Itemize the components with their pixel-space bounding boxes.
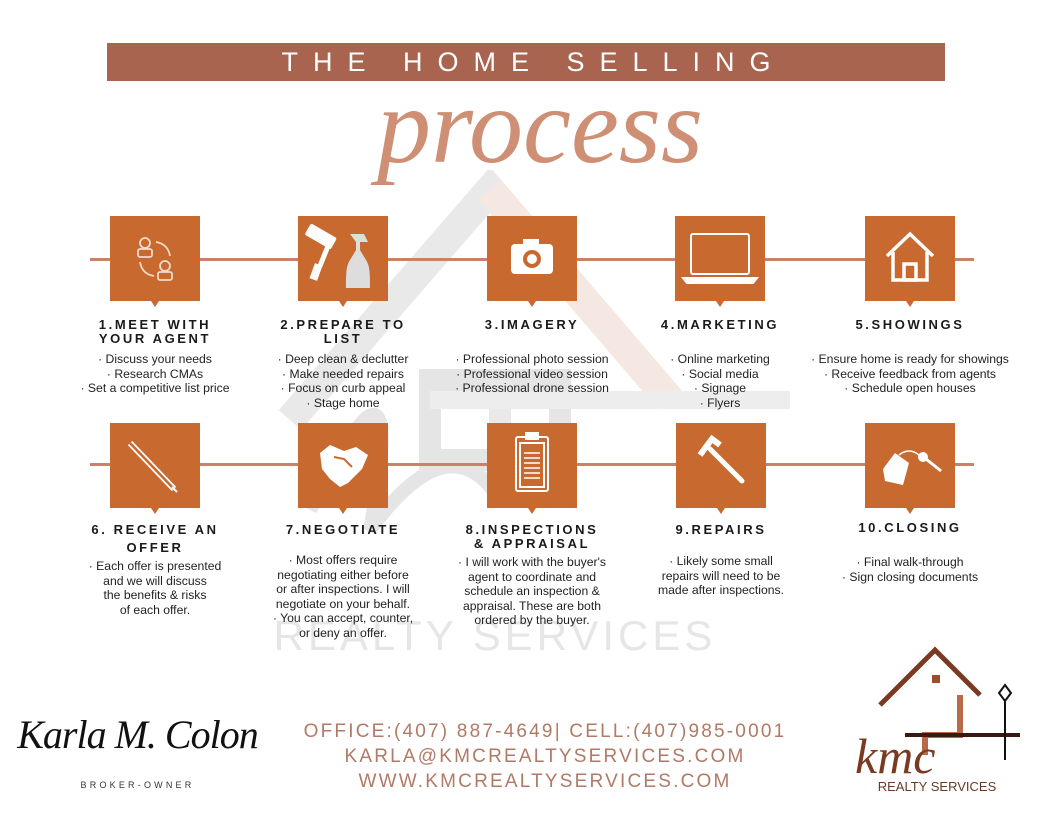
text: step 8: appraisal. These are both [463,599,601,613]
watermark: realty services text: REALTY SERVICES [274,612,716,659]
text: step 1: YOUR AGENT [99,331,211,346]
script title: process: process [377,67,703,186]
text: step 3: 3.IMAGERY [485,317,579,332]
icon: hammer [676,423,766,508]
logo: kmc realty services: REALTY SERVICES [878,779,997,794]
icon: roller and spray [298,216,388,301]
text: step 5: · Ensure home is ready for showings [811,352,1009,366]
text: step 3: · Professional drone session [455,381,609,395]
icon: pen [110,423,200,508]
step 6 [89,423,221,617]
title bar: THE HOME SELLING [281,47,786,77]
text: step 6: and we will discuss [103,574,207,588]
text: step 4: · Social media [681,367,759,381]
step 4 [661,216,779,410]
contact info: WWW.KMCREALTYSERVICES.COM [358,771,732,792]
text: step 6: · Each offer is presented [89,559,221,573]
text: step 8: schedule an inspection & [464,584,600,598]
text: step 8: agent to coordinate and [468,570,596,584]
text: step 4 [661,317,779,410]
icon: house keys [865,423,955,508]
text: step 8: ordered by the buyer. [474,613,590,627]
icon: clipboard [487,423,577,508]
text: step 7: negotiate on your behalf. [276,597,410,611]
text: step 10 [842,520,978,584]
text: step 7: · Most offers require [289,553,397,567]
text: step 7: · You can accept, counter, [273,611,413,625]
logo: kmc realty services [855,646,1020,794]
text: step 6: of each offer. [120,603,190,617]
text: step 4: · Signage [694,381,746,395]
icon: people [110,216,200,301]
text: step 10: · Sign closing documents [842,570,978,584]
step 1 [80,216,230,395]
text: step 3 [455,317,609,395]
title bar [107,43,945,81]
text: step 7: or deny an offer. [299,626,387,640]
text: step 6: 6. RECEIVE AN [91,522,219,537]
text: step 8: 8.INSPECTIONS [466,522,598,537]
step 7 [273,423,413,640]
text: step 1: 1.MEET WITH [99,317,211,332]
signature: BROKER-OWNER [81,780,194,790]
text: step 1: · Discuss your needs [98,352,212,366]
text: step 8: & APPRAISAL [474,536,590,551]
icon: handshake [298,423,388,508]
text: step 1 [80,317,230,395]
text: step 9: · Likely some small [669,554,773,568]
text: step 7: or after inspections. I will [276,582,410,596]
text: step 2: 2.PREPARE TO [280,317,406,332]
text: step 6 [89,522,221,617]
text: step 7: negotiating either before [277,568,409,582]
text: step 10: · Final walk-through [856,555,964,569]
text: step 4: · Online marketing [670,352,770,366]
icon: house [865,216,955,301]
text: step 8: · I will work with the buyer's [458,555,606,569]
step 8 [458,423,606,627]
text: step 2 [278,317,408,410]
text: step 7: 7.NEGOTIATE [286,522,400,537]
text: step 9 [658,522,784,597]
timeline line row 2 [90,463,974,466]
step 2 [278,216,408,410]
text: step 4: 4.MARKETING [661,317,779,332]
timeline line row 1 [90,258,974,261]
step 10 [842,423,978,584]
watermark: house outline [279,170,790,534]
text: step 5: · Receive feedback from agents [824,367,996,381]
step 3 [455,216,609,395]
text: step 8 [458,522,606,627]
text: step 5: 5.SHOWINGS [855,317,965,332]
text: step 2: LIST [324,331,362,346]
text: step 9: 9.REPAIRS [675,522,767,537]
text: step 4: · Flyers [700,396,740,410]
step 9 [658,423,784,597]
text: step 6: the benefits & risks [104,588,206,602]
text: step 3: · Professional photo session [455,352,609,366]
text: step 6: OFFER [126,540,184,555]
text: step 5: · Schedule open houses [844,381,976,395]
text: step 2: · Focus on curb appeal [281,381,405,395]
text: step 10: 10.CLOSING [858,520,962,535]
icon: laptop [675,216,765,301]
contact info [304,721,786,792]
contact info: OFFICE:(407) 887-4649| CELL:(407)985-0001 [304,721,786,742]
text: step 7 [273,522,413,640]
text: step 5 [811,317,1009,395]
text: step 2: · Deep clean & declutter [278,352,408,366]
text: step 2: · Stage home [306,396,380,410]
icon: camera [487,216,577,301]
text: step 2: · Make needed repairs [282,367,404,381]
text: step 1: · Research CMAs [107,367,203,381]
text: step 9: repairs will need to be [662,569,780,583]
contact info: KARLA@KMCREALTYSERVICES.COM [344,746,746,767]
text: step 1: · Set a competitive list price [80,381,230,395]
signature: Karla M. Colon [17,712,258,757]
logo: kmc realty services: kmc [855,728,936,784]
signature [16,712,258,790]
step 5 [811,216,1009,395]
text: step 9: made after inspections. [658,583,784,597]
text: step 3: · Professional video session [456,367,608,381]
